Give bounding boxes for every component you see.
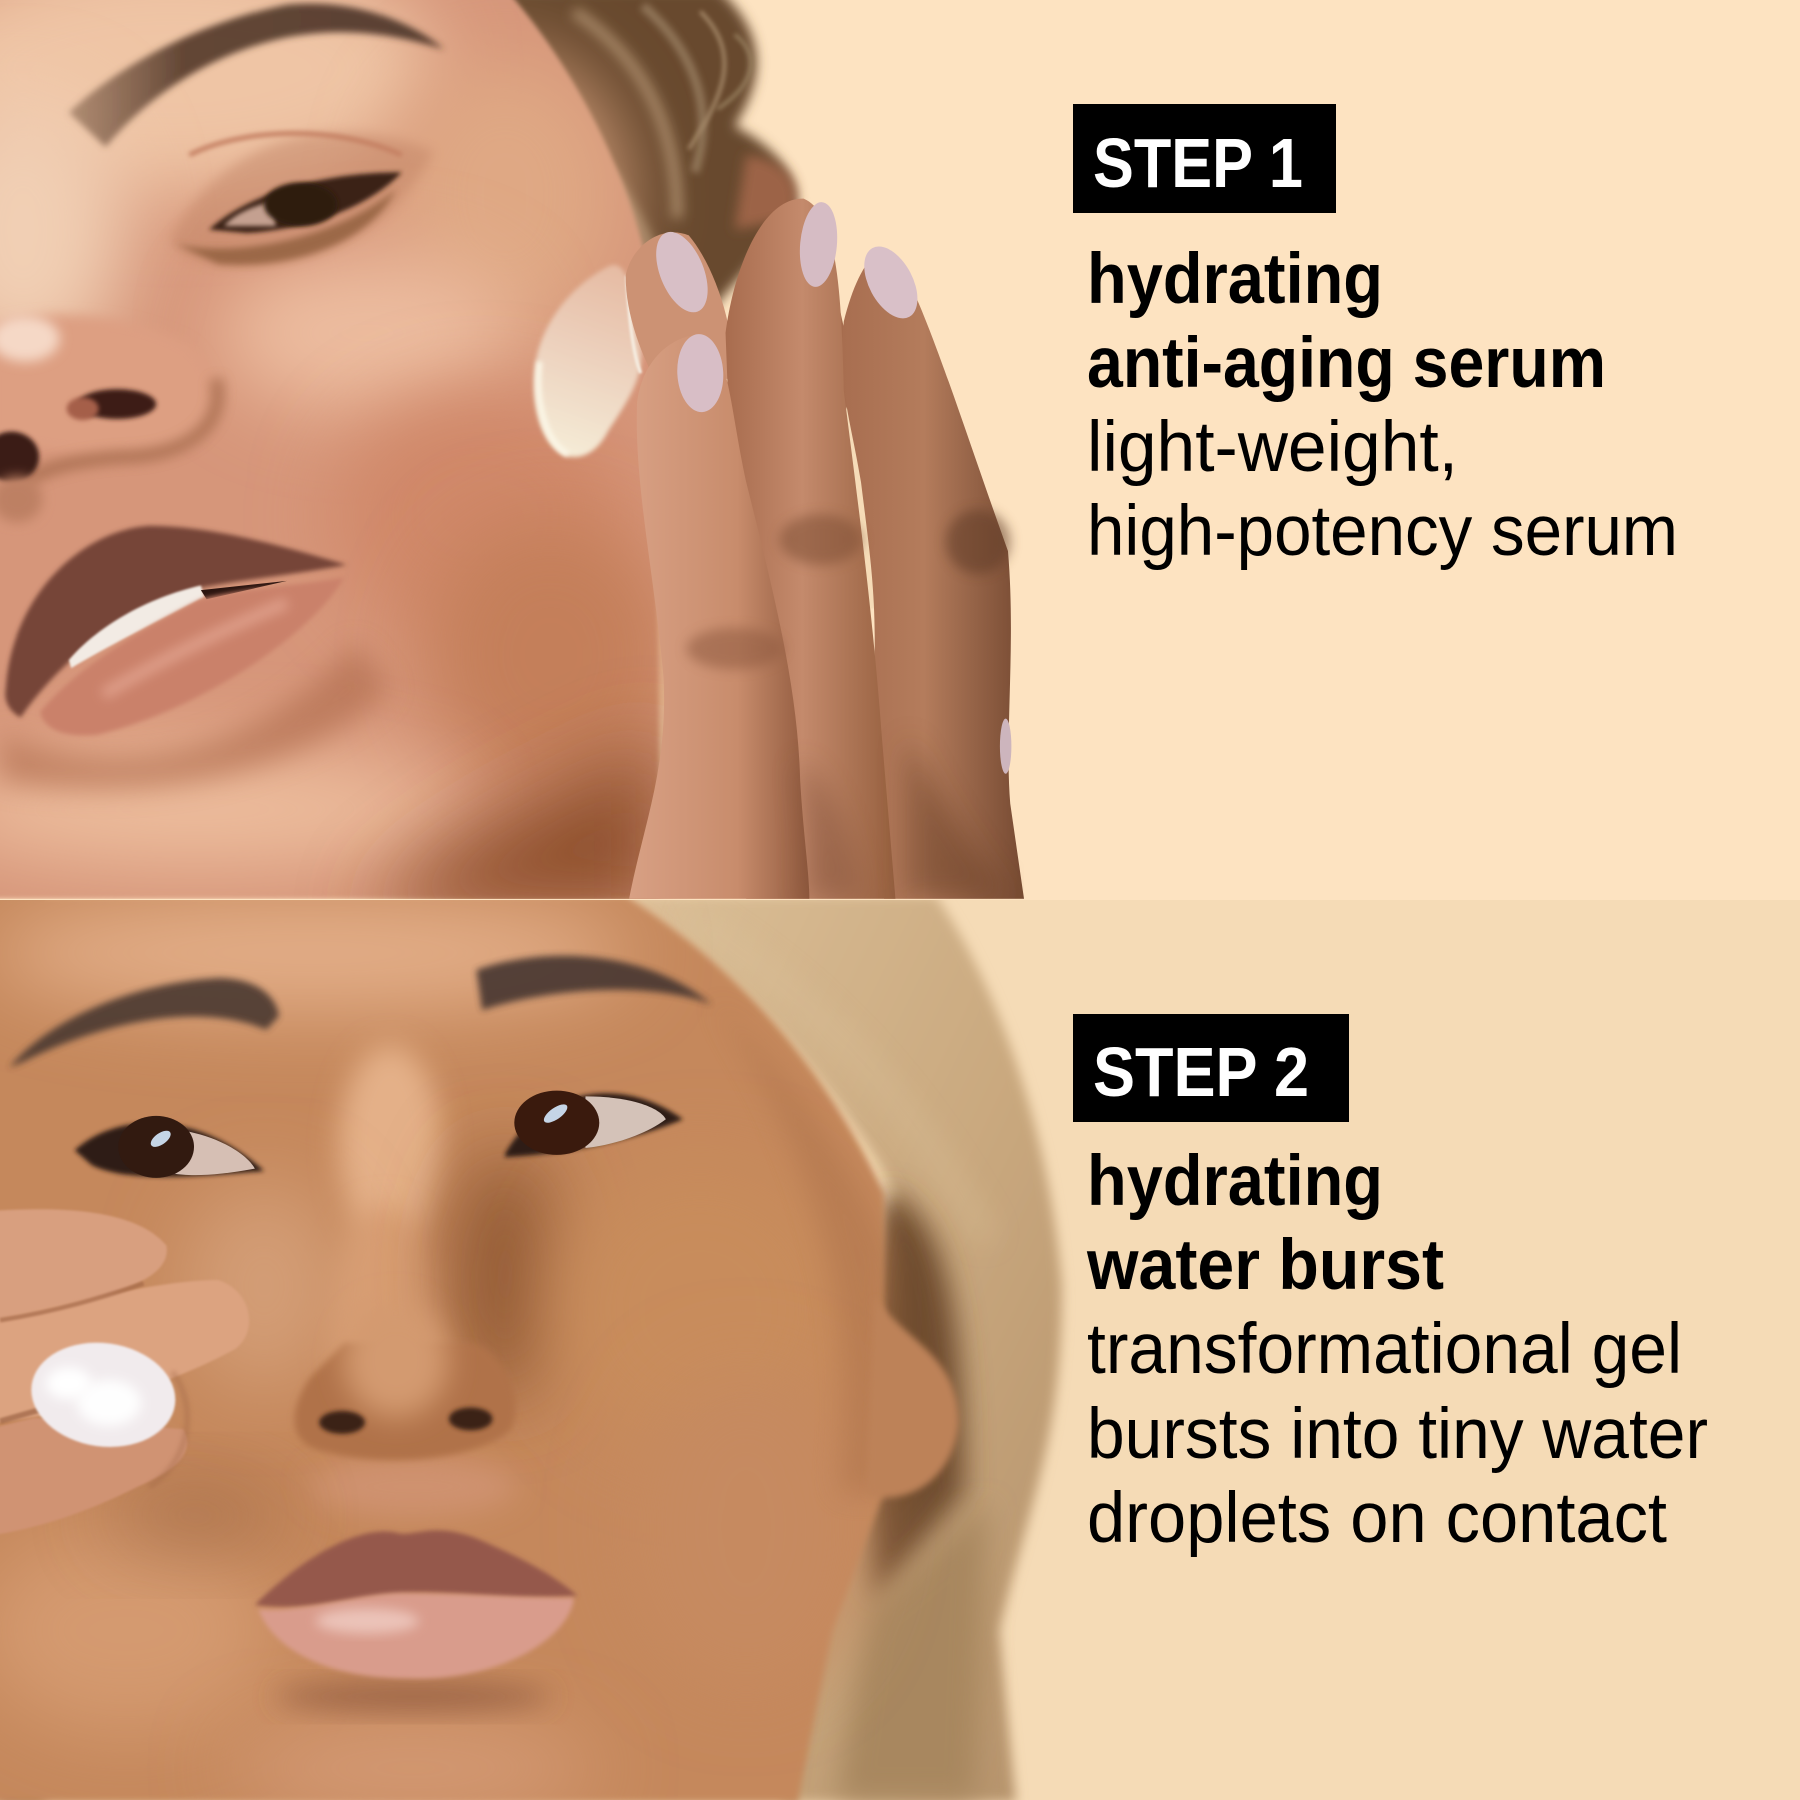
photo: woman applying serum to cheek: [0, 0, 1024, 918]
blonde hair: [0, 895, 1062, 1800]
step 1 text block: hydrating: [1087, 240, 1383, 319]
eyebrow: [69, 3, 444, 147]
step 1 label: STEP 1: [1093, 124, 1303, 202]
panel: step 1 background: [0, 0, 1800, 900]
step 2 text block: water burst: [1086, 1226, 1444, 1305]
step 1 text block: light-weight,: [1087, 408, 1458, 487]
eyes: [75, 1091, 683, 1178]
ear: [867, 1297, 959, 1497]
fingers: [0, 1209, 249, 1536]
panel: step 2 background: [0, 900, 1800, 1800]
step 1 text block: high-potency serum: [1087, 492, 1678, 571]
step 2 text block: droplets on contact: [1087, 1479, 1667, 1558]
step 2 text block: [1086, 1142, 1708, 1558]
nose: [0, 315, 218, 522]
lips: [5, 526, 347, 735]
nose: [294, 1303, 516, 1460]
hair: [494, 0, 796, 310]
step 2 text block: hydrating: [1087, 1142, 1383, 1221]
step 1 text block: anti-aging serum: [1087, 324, 1606, 403]
eye: [170, 133, 434, 268]
cream smear: [534, 265, 641, 457]
nails: [646, 201, 1011, 774]
cream dollop: [25, 1334, 182, 1456]
lips: [255, 1530, 577, 1679]
eyebrows: [9, 956, 712, 1068]
step 2 text block: transformational gel: [1087, 1310, 1682, 1389]
step 2 label: [1073, 1014, 1349, 1122]
face skin: [0, 895, 890, 1800]
hand: [626, 199, 1024, 899]
face skin: [0, 0, 677, 918]
step 1 text block: [1087, 240, 1678, 571]
step 2 label: STEP 2: [1093, 1033, 1309, 1111]
photo: woman holding cream on fingers: [0, 895, 1062, 1800]
step 1 label: [1073, 104, 1336, 213]
step 2 text block: bursts into tiny water: [1087, 1395, 1708, 1474]
